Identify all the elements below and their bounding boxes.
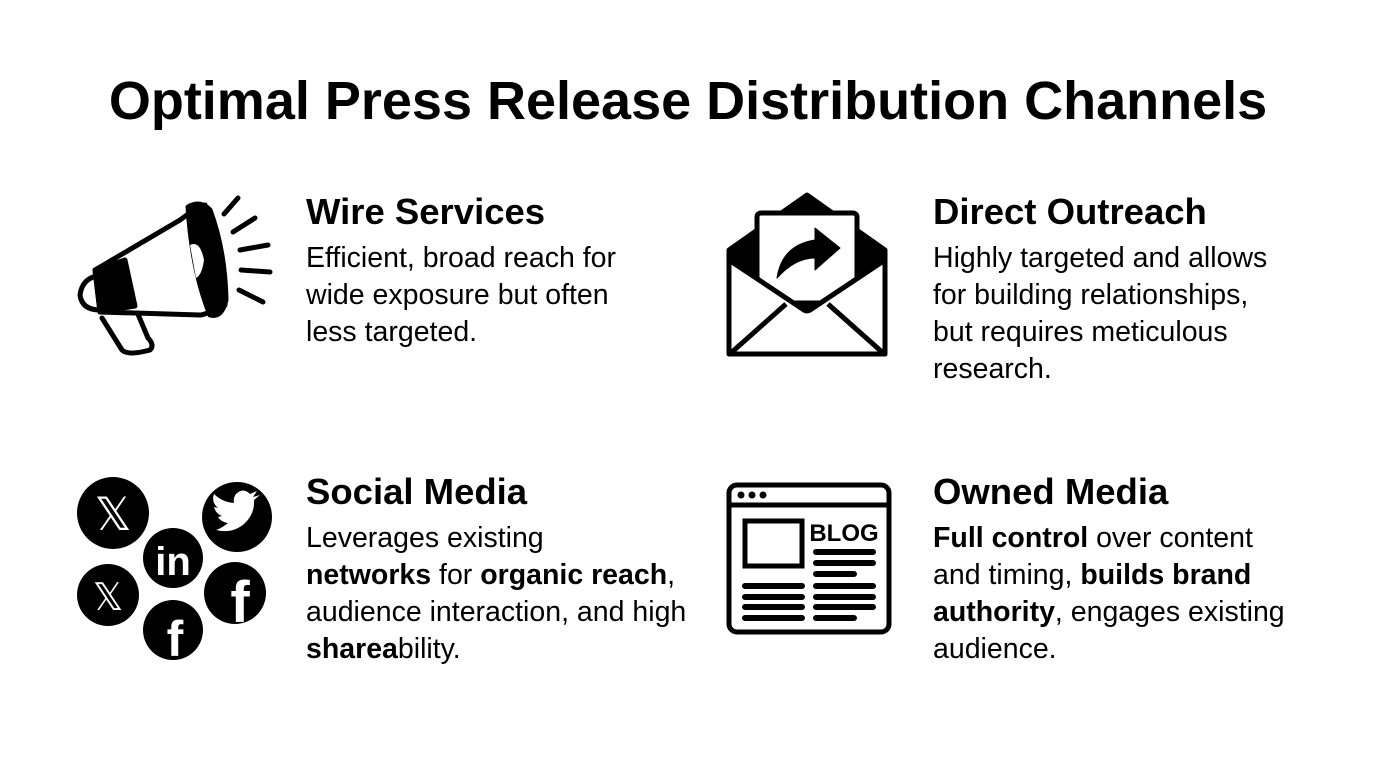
- heading: social media: Social Media: [306, 471, 527, 512]
- text: owned media: and timing, builds brand: [933, 559, 1251, 591]
- heading: owned media: Owned Media: [933, 471, 1168, 512]
- text: direct outreach: [933, 242, 1267, 385]
- icon: social media circles: 𝕏: [93, 577, 123, 619]
- icon: envelope: [726, 192, 888, 356]
- icon: megaphone: [78, 196, 272, 356]
- icon: social media circles: [77, 477, 272, 667]
- text: direct outreach: but requires meticulous: [933, 316, 1228, 348]
- text: social media: networks for organic reach,: [306, 559, 675, 591]
- text: social media: audience interaction, and high: [306, 596, 686, 628]
- icon: social media circles: f: [167, 611, 184, 667]
- heading: direct outreach: Direct Outreach: [933, 191, 1207, 232]
- icon: blog browser: BLOG: [809, 520, 879, 547]
- text: owned media: Full control over content: [933, 522, 1253, 554]
- text: social media: [306, 522, 686, 665]
- text: direct outreach: research.: [933, 353, 1052, 385]
- text: wire services: [306, 242, 616, 348]
- icon: social media circles: 𝕏: [94, 488, 132, 540]
- icon: blog browser: [726, 482, 892, 634]
- text: wire services: wide exposure but often: [306, 279, 609, 311]
- text: direct outreach: for building relationships,: [933, 279, 1248, 311]
- text: owned media: authority, engages existing: [933, 596, 1285, 628]
- heading: wire services: Wire Services: [306, 191, 545, 232]
- text: owned media: audience.: [933, 633, 1057, 665]
- text: wire services: Efficient, broad reach for: [306, 242, 616, 274]
- title: Optimal Press Release Distribution Channels: [109, 71, 1267, 131]
- text: social media: Leverages existing: [306, 522, 544, 554]
- text: wire services: less targeted.: [306, 316, 477, 348]
- icon: social media circles: in: [155, 540, 191, 584]
- text: social media: shareability.: [306, 633, 461, 665]
- text: direct outreach: Highly targeted and allows: [933, 242, 1267, 274]
- icon: social media circles: f: [230, 570, 250, 635]
- text: owned media: [933, 522, 1285, 665]
